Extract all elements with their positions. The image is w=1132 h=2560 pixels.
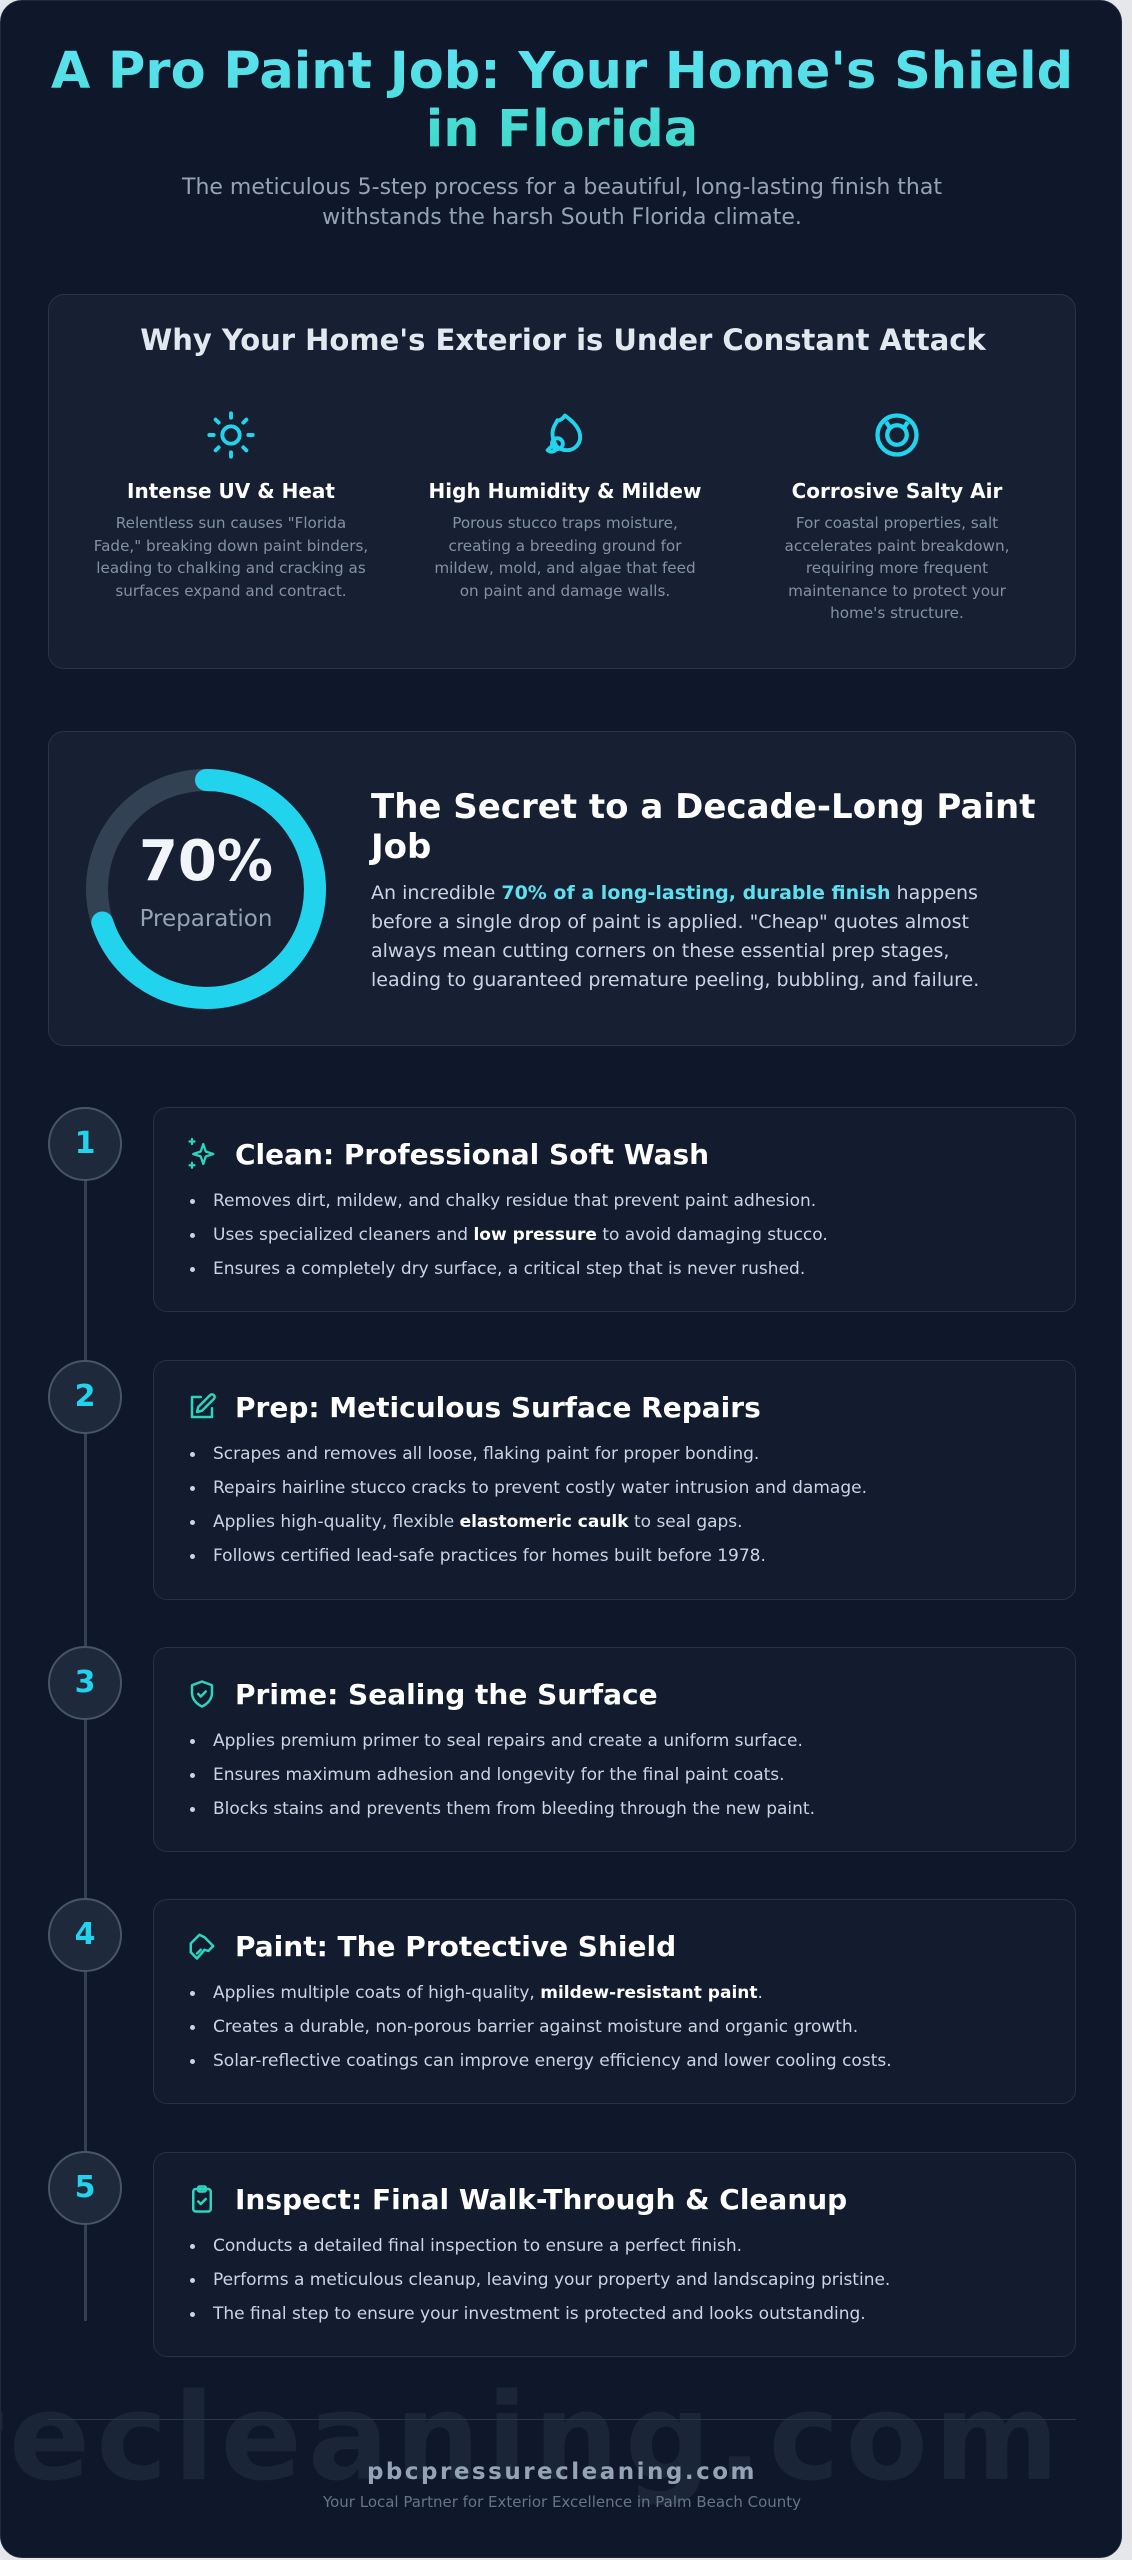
donut chart: Preparation: [140, 906, 272, 932]
step 3 number: 3: [75, 1665, 95, 1700]
step 2 number: 2: [75, 1379, 95, 1414]
heading: The Secret to a Decade-Long Paint Job: [371, 787, 1036, 867]
step 3 card: [153, 1647, 1076, 1852]
donut chart: [86, 769, 326, 1009]
panel: 70% secret: [48, 731, 1076, 1046]
step 1 card: Ensures a completely dry surface, a critical step that is never rushed.: [213, 1259, 805, 1279]
title: A Pro Paint Job: Your Home's Shield: [51, 42, 1073, 101]
panel heading: Why Your Home's Exterior is Under Constant Attack: [140, 323, 986, 357]
column: UV: Intense UV & Heat: [127, 479, 335, 503]
timeline line: [84, 1151, 87, 2321]
step 2 card: Repairs hairline stucco cracks to prevent costly water intrusion and damage.: [213, 1478, 867, 1498]
column: UV: Relentless sun causes "Florida Fade," breaking down paint binders, leading to chalking and cracking as surfaces expand and contract.: [94, 514, 368, 600]
icon: sparkles: [188, 1138, 214, 1169]
step 3 card: Blocks stains and prevents them from bleeding through the new paint.: [213, 1799, 815, 1819]
footer domain: pbcpressurecleaning.com: [367, 2459, 757, 2485]
step 1 card: Uses specialized cleaners and low pressure to avoid damaging stucco.: [213, 1225, 828, 1245]
step 5 number: [48, 2151, 122, 2225]
subtitle: [182, 175, 942, 230]
step 4 number: 4: [75, 1917, 95, 1952]
icon: sun: [207, 411, 255, 459]
step 4 card: [153, 1899, 1076, 2104]
column: salt: For coastal properties, salt accelerates paint breakdown, requiring more frequent maintenance to protect your home's structure.: [785, 514, 1009, 622]
step 1 card: Clean: Professional Soft Wash: [235, 1138, 709, 1170]
step 2 number: [48, 1360, 122, 1434]
step 5 number: 5: [75, 2170, 95, 2205]
step 1 card: Removes dirt, mildew, and chalky residue that prevent paint adhesion.: [213, 1191, 816, 1211]
step 4 card: Creates a durable, non-porous barrier against moisture and organic growth.: [213, 2017, 858, 2037]
step 5 card: Performs a meticulous cleanup, leaving your property and landscaping pristine.: [213, 2270, 890, 2290]
icon: edit: [190, 1393, 216, 1418]
donut chart: 70%: [139, 829, 273, 894]
icon: salt ring: [875, 413, 919, 457]
step 5 card: [153, 2152, 1076, 2357]
subtitle: withstands the harsh South Florida climate.: [322, 205, 802, 230]
footer divider: [48, 2419, 1076, 2420]
step 1 card: [153, 1107, 1076, 1312]
step 4 card: Paint: The Protective Shield: [235, 1930, 676, 1962]
column: UV: [94, 411, 368, 600]
step 5 card: The final step to ensure your investment is protected and looks outstanding.: [213, 2304, 866, 2324]
subtitle: The meticulous 5-step process for a beautiful, long-lasting finish that: [182, 175, 942, 200]
panel: attack: [48, 294, 1076, 669]
icon: shield check: [190, 1680, 214, 1708]
step 2 card: Prep: Meticulous Surface Repairs: [235, 1390, 761, 1424]
step 4 number: [48, 1898, 122, 1972]
step 2 card: [153, 1360, 1076, 1600]
step 4 card: Applies multiple coats of high-quality, mildew-resistant paint.: [213, 1983, 763, 2003]
step 2 card: Follows certified lead-safe practices for homes built before 1978.: [213, 1546, 766, 1566]
column: humidity: Porous stucco traps moisture, creating a breeding ground for mildew, mold, and algae that feed on paint and damage walls.: [434, 514, 696, 600]
column: salt: Corrosive Salty Air: [792, 479, 1002, 503]
step 3 number: [48, 1646, 122, 1720]
icon: flame/mildew: [546, 414, 582, 454]
step 5 card: Inspect: Final Walk-Through & Cleanup: [235, 2182, 847, 2216]
step 2 card: Applies high-quality, flexible elastomeric caulk to seal gaps.: [213, 1512, 743, 1532]
step 1 number: [48, 1107, 122, 1181]
icon: paint brush: [190, 1934, 214, 1960]
step 3 card: Ensures maximum adhesion and longevity for the final paint coats.: [213, 1765, 785, 1785]
step 3 card: Applies premium primer to seal repairs and create a uniform surface.: [213, 1731, 803, 1751]
title: [1, 43, 1123, 159]
step 1 number: 1: [75, 1126, 95, 1161]
column: humidity: High Humidity & Mildew: [429, 479, 701, 503]
body text: An incredible 70% of a long-lasting, durable finish happens before a single drop of paint is applied. "Cheap" quotes almost always mean cutting corners on these essential prep stages, leading to guaranteed premature peeling, bubbling, and failure.: [371, 882, 979, 991]
icon: clipboard check: [192, 2185, 212, 2213]
step 5 card: Conducts a detailed final inspection to ensure a perfect finish.: [213, 2236, 742, 2256]
step 2 card: Scrapes and removes all loose, flaking paint for proper bonding.: [213, 1444, 759, 1464]
column: salt: [785, 413, 1009, 622]
footer tagline: Your Local Partner for Exterior Excellence in Palm Beach County: [323, 2493, 801, 2511]
column: humidity: [429, 414, 701, 600]
title: in Florida: [426, 100, 698, 159]
step 3 card: Prime: Sealing the Surface: [235, 1678, 658, 1710]
step 4 card: Solar-reflective coatings can improve energy efficiency and lower cooling costs.: [213, 2051, 892, 2071]
